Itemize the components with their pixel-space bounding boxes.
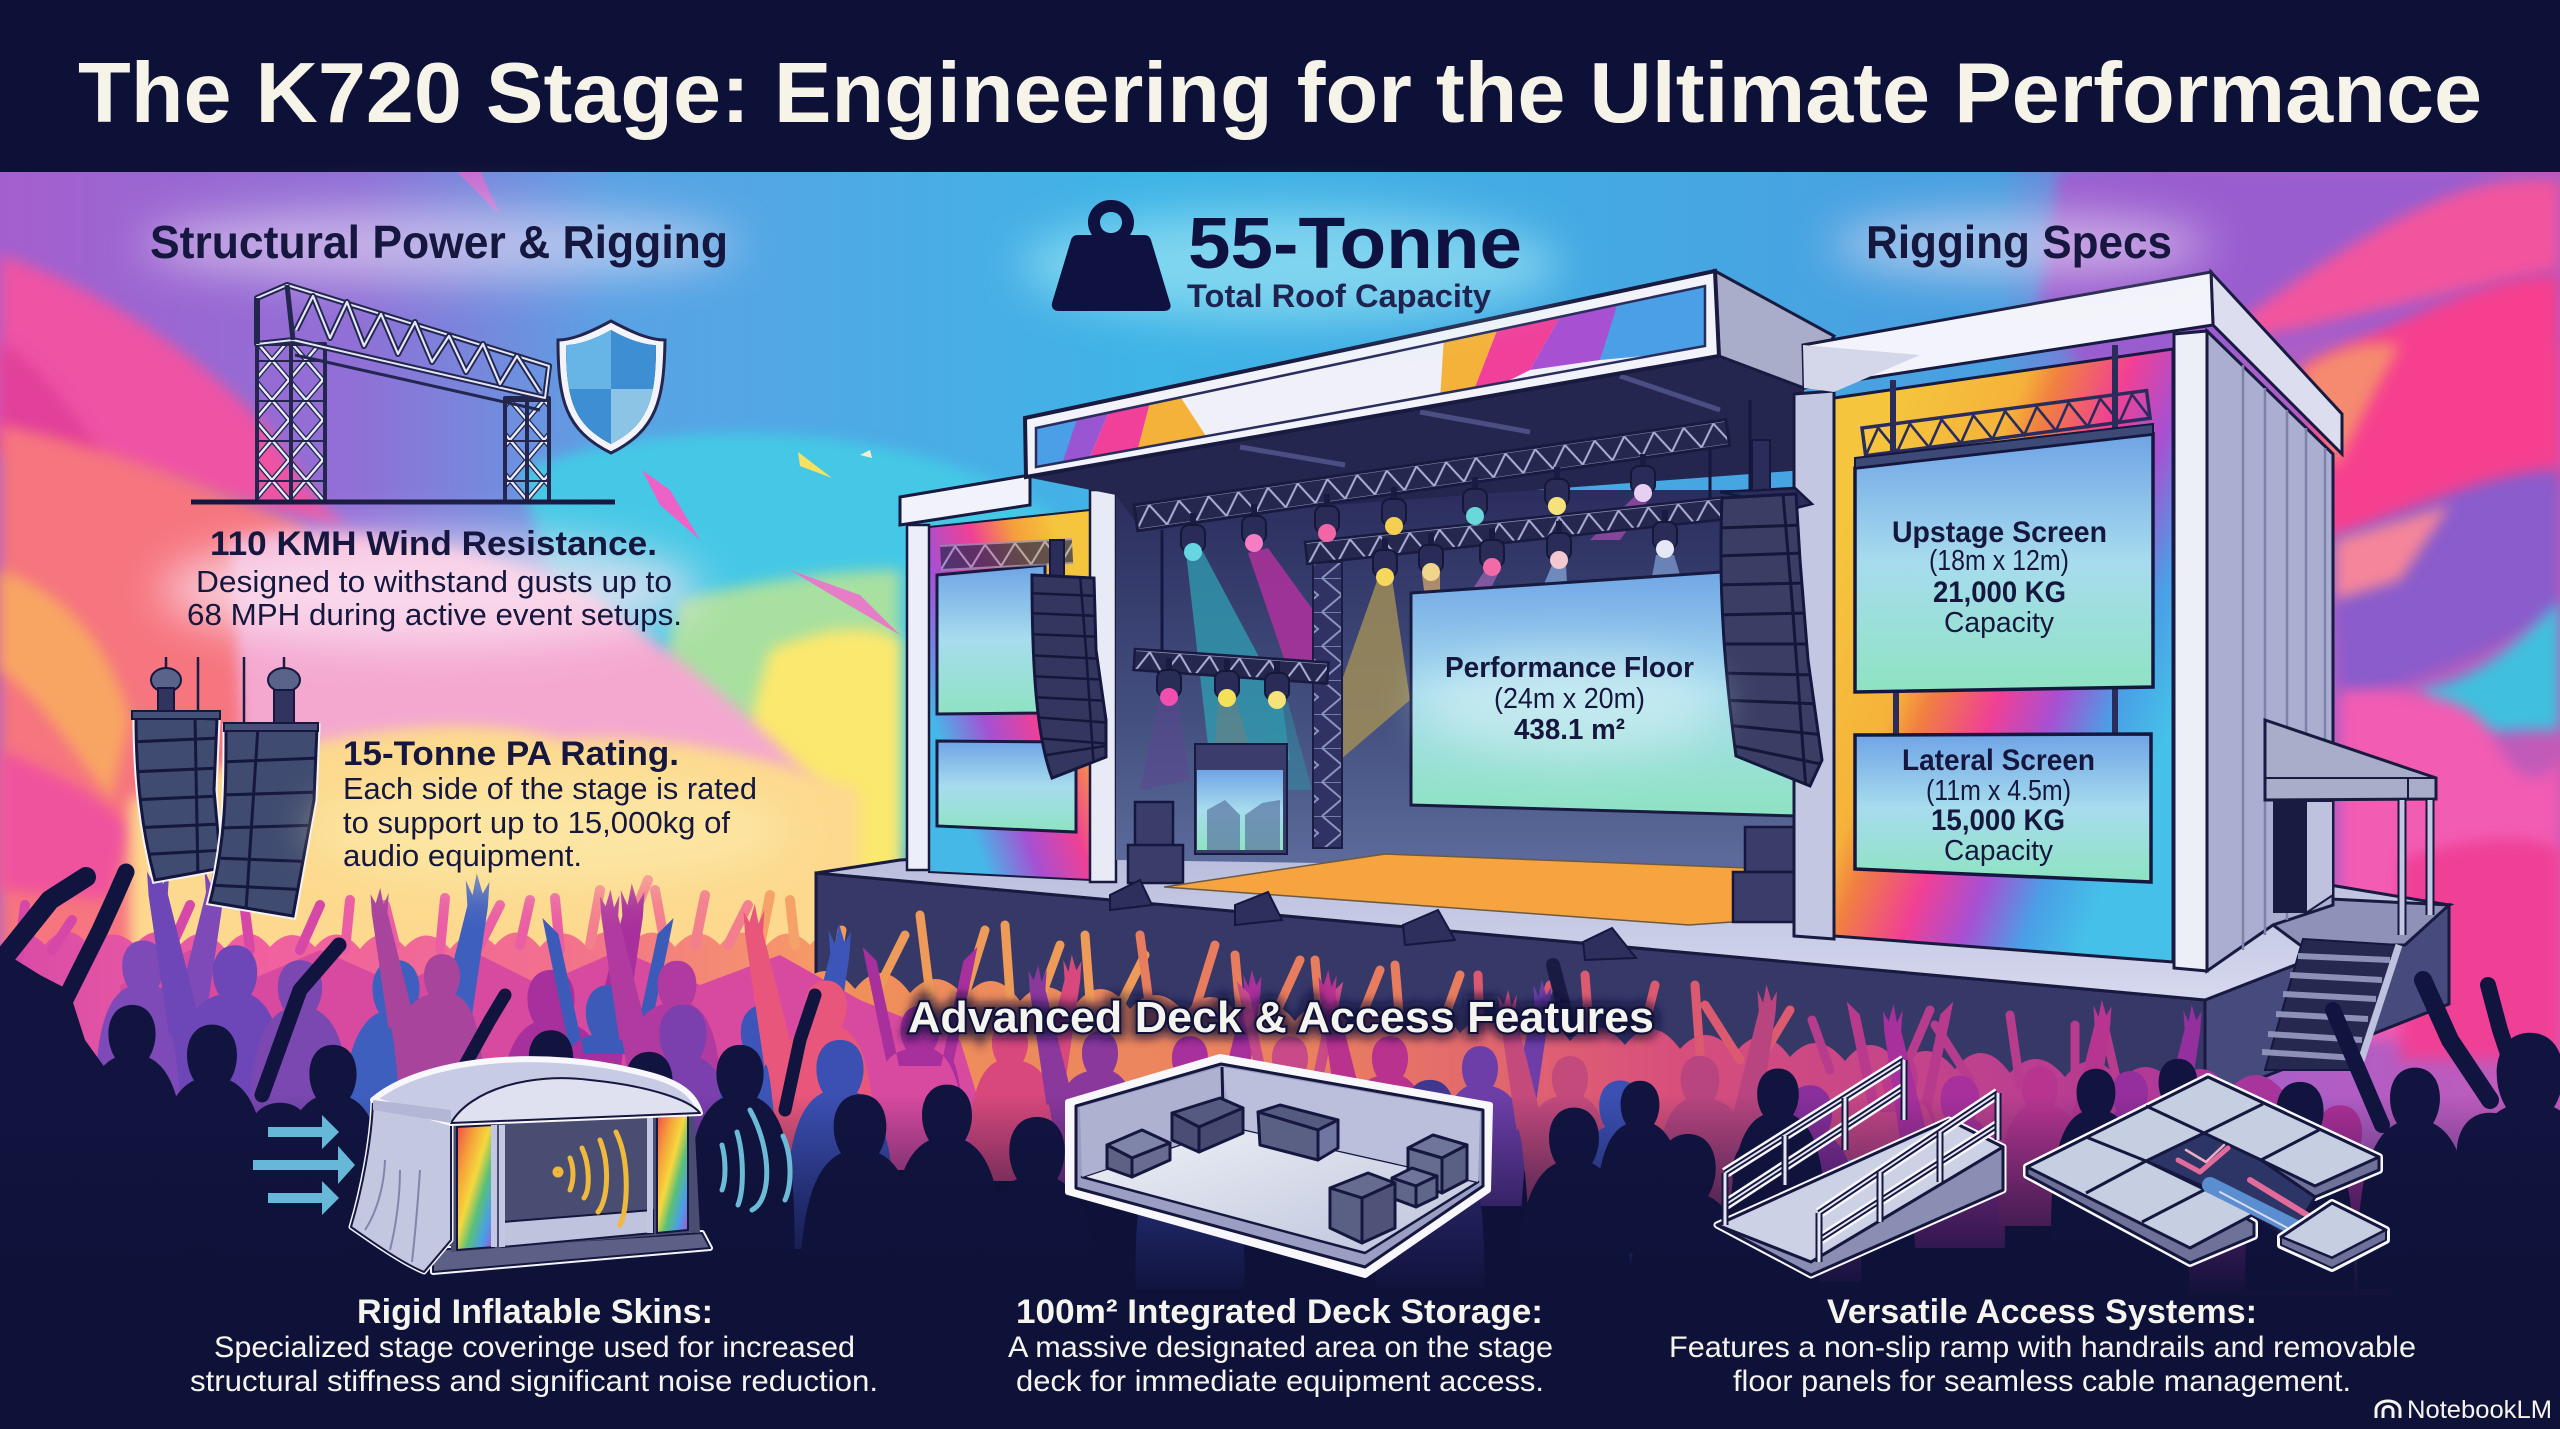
heading: advanced deck: Advanced Deck & Access Features [908,993,1654,1042]
vertical truss [1313,562,1342,848]
right line array speaker [1715,440,1830,790]
cable pit [2146,1133,2315,1240]
roof front panel [1803,272,2213,388]
title band [0,0,2560,172]
left line array speaker [1030,539,1108,780]
light beams [1140,495,1700,790]
rigging hangers [1162,400,1750,650]
deck top [816,850,2449,1000]
lower truss [1134,649,1329,683]
lateral screen label: Capacity [1944,835,2053,867]
caption: access systems: Features a non-slip ramp with handrails and removable [1669,1331,2416,1364]
panel grid [2086,1104,2319,1222]
crowd orange row [800,915,2285,1160]
icon: truss gate [191,285,615,502]
caption: rigid inflatable skins: Specialized stage coveringe used for increased [214,1331,855,1364]
left wing wall [929,510,1090,880]
PA rating text: audio equipment. [343,838,582,873]
caption: deck storage [1008,1293,1553,1398]
heading: rigging specs: Rigging Specs [1866,216,2172,268]
roof banner frame [1036,286,1705,467]
wind resistance text: 110 KMH Wind Resistance. [210,525,657,563]
upstage screen label: Upstage Screen [1892,516,2107,549]
upstage truss [1862,391,2150,456]
heading: structural power: Structural Power & Rigging [150,216,728,268]
PA rating text: 15-Tonne PA Rating. [343,735,679,773]
central stage [816,271,2449,1120]
wind resistance text: 68 MPH during active event setups. [187,597,682,632]
roof [373,1059,700,1123]
icon: shield [558,321,665,453]
lateral screen label [1902,744,2095,867]
55-Tonne figure: 55-Tonne [1188,204,1522,284]
side platform [2273,899,2449,945]
flight cases [1107,1098,1467,1243]
PA rating text: to support up to 15,000kg of [343,805,730,840]
PA rating text: Each side of the stage is rated [343,771,757,806]
wedge monitors [1110,880,1636,960]
stage base side [2205,905,2449,1100]
caption: access systems [1669,1293,2416,1398]
icon: deck storage [1068,1057,1490,1275]
right wing structure [1794,272,2449,1070]
panel outline [2027,1077,2379,1263]
screen hangers [1893,345,2115,736]
wind resistance text: Designed to withstand gusts up to [196,564,672,599]
icon: inflatable skins [253,1059,790,1272]
performance floor label: Performance Floor [1445,652,1694,684]
base [433,1233,710,1272]
icon: removable floor panels [2027,1077,2386,1268]
lateral screen label: (11m x 4.5m) [1926,775,2071,807]
wind resistance text [160,525,700,645]
crowd dark silhouettes [0,950,2560,1408]
crowd fade to navy [0,1095,2560,1300]
rainbow wall [1834,349,2173,962]
back crowd [0,880,855,1120]
door [2273,801,2306,913]
yellow sound waves [555,1132,626,1225]
title: The K720 Stage: Engineering for the Ultimate Performance [78,46,2482,141]
performance floor label: 438.1 m² [1514,714,1625,746]
caption: access systems: floor panels for seamless cable management. [1733,1365,2351,1398]
upstage truss [1134,420,1730,531]
canopy [2265,720,2436,800]
PA rating text [310,735,790,885]
caption: deck storage: deck for immediate equipment access. [1016,1365,1544,1398]
caption: access systems: Versatile Access Systems: [1827,1293,2257,1331]
lateral screen label: Lateral Screen [1902,744,2095,777]
left wing screen 2 [937,741,1076,832]
lateral screen label: 15,000 KG [1931,804,2065,837]
second truss [1305,497,1725,564]
moving lights [1157,454,1677,709]
loose panel [2281,1203,2386,1268]
interior [451,1113,700,1252]
roof banner [1030,280,1710,470]
caption: rigid inflatable skins [190,1293,878,1398]
side stairs [2262,939,2399,1070]
left wing screen 1 [937,565,1045,714]
right floor monitors stack [1733,827,1801,922]
performance floor label [1420,652,1720,755]
panel tops [2027,1077,2379,1248]
stage base front [816,873,2205,1120]
roof front [1025,271,1719,477]
wind arrows [253,1115,355,1215]
right column [2174,331,2207,971]
caption: deck storage: 100m² Integrated Deck Storage: [1016,1293,1543,1331]
left floor monitors stack [1128,802,1183,883]
upstage screen [1855,434,2153,692]
caption: deck storage: A massive designated area on the stage [1008,1331,1553,1364]
performance floor label: (24m x 20m) [1494,683,1645,715]
caption: rigid inflatable skins: Rigid Inflatable Skins: [357,1293,713,1331]
roof side panel [2211,272,2342,454]
blue sound waves [722,1110,790,1210]
roof underside [1026,356,1804,520]
upstage screen label [1892,516,2107,639]
upstage screen label: Capacity [1944,607,2054,639]
left wing roof [900,475,1030,525]
performance floor [1164,854,1775,925]
crowd colour people [95,864,2391,1312]
icon: PA speakers [130,657,320,916]
heading: advanced deck: Advanced Deck & Access Features [908,993,1654,1042]
canopy posts [2402,800,2430,935]
left wing truss [940,538,1073,571]
back wall [1116,490,1800,870]
upstage screen label: (18m x 12m) [1929,545,2069,577]
sky background [0,170,2560,1170]
crowd far-left colour row [120,950,1000,1170]
upstage screen label: 21,000 KG [1933,576,2066,609]
roof capacity label: Total Roof Capacity [1187,278,1491,314]
NotebookLM mark: NotebookLM [2407,1396,2552,1424]
rainbow columns [457,1125,494,1250]
lateral screen [1855,734,2151,882]
roof capacity callout [1020,200,1560,320]
crowd raised dark arms [0,872,2520,1125]
roof side [1715,271,1834,388]
heading: rigging specs [1830,213,2210,277]
front crowd [0,864,2560,1429]
side wall [2207,331,2333,971]
caption: rigid inflatable skins: structural stiffness and significant noise reduction. [190,1365,878,1398]
main screen [1411,567,1796,816]
left drape [351,1100,451,1272]
left wing columns [907,525,929,870]
left column [1794,391,1834,939]
doorway [1195,744,1287,854]
icon: access ramp [1717,1060,2003,1275]
icon: weight [1052,200,1171,311]
